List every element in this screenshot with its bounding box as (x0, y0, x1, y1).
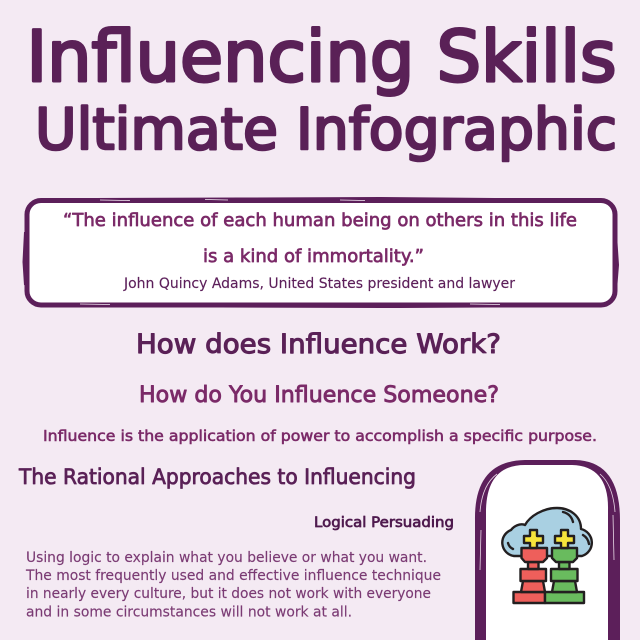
paragraph: logical persuading: Using logic to explain what you believe or what you want. (26, 550, 427, 566)
paragraph: logical persuading (25, 550, 441, 620)
quote text: is a kind of immortality.” (203, 246, 424, 267)
quote attribution: John Quincy Adams, United States president and lawyer (123, 276, 515, 292)
title: Influencing Skills (26, 16, 616, 98)
heading: rational approaches: The Rational Approaches to Influencing (18, 465, 416, 489)
panel: quote (24, 198, 618, 307)
card brushed frame (475, 460, 620, 640)
paragraph: logical persuading: and in some circumstances will not work at all. (26, 604, 352, 620)
title: Ultimate Infographic (35, 97, 617, 163)
subheading: how do you influence someone: How do You Influence Someone? (139, 382, 499, 408)
quote text: “The influence of each human being on others in this life (63, 210, 577, 231)
panel: icon card (475, 460, 620, 640)
paragraph: logical persuading: in nearly every culture, but it does not work with everyone (26, 586, 431, 602)
icon: red chess piece (514, 548, 547, 603)
definition of influence: Influence is the application of power to accomplish a specific purpose. (43, 427, 597, 445)
icon: cloud (502, 508, 592, 556)
quote text (63, 210, 577, 267)
icon: yellow crosses (524, 530, 574, 548)
icon: green chess piece (545, 548, 584, 603)
heading: how does influence work: How does Influence Work? (136, 329, 501, 360)
quote box brushed border (24, 198, 618, 307)
title (26, 16, 617, 163)
paragraph: logical persuading: The most frequently used and effective influence technique (25, 568, 441, 584)
subheading: logical persuading: Logical Persuading (314, 515, 454, 531)
icon: cloud highlights (508, 512, 589, 549)
icon: chess pieces and cloud (502, 508, 592, 603)
